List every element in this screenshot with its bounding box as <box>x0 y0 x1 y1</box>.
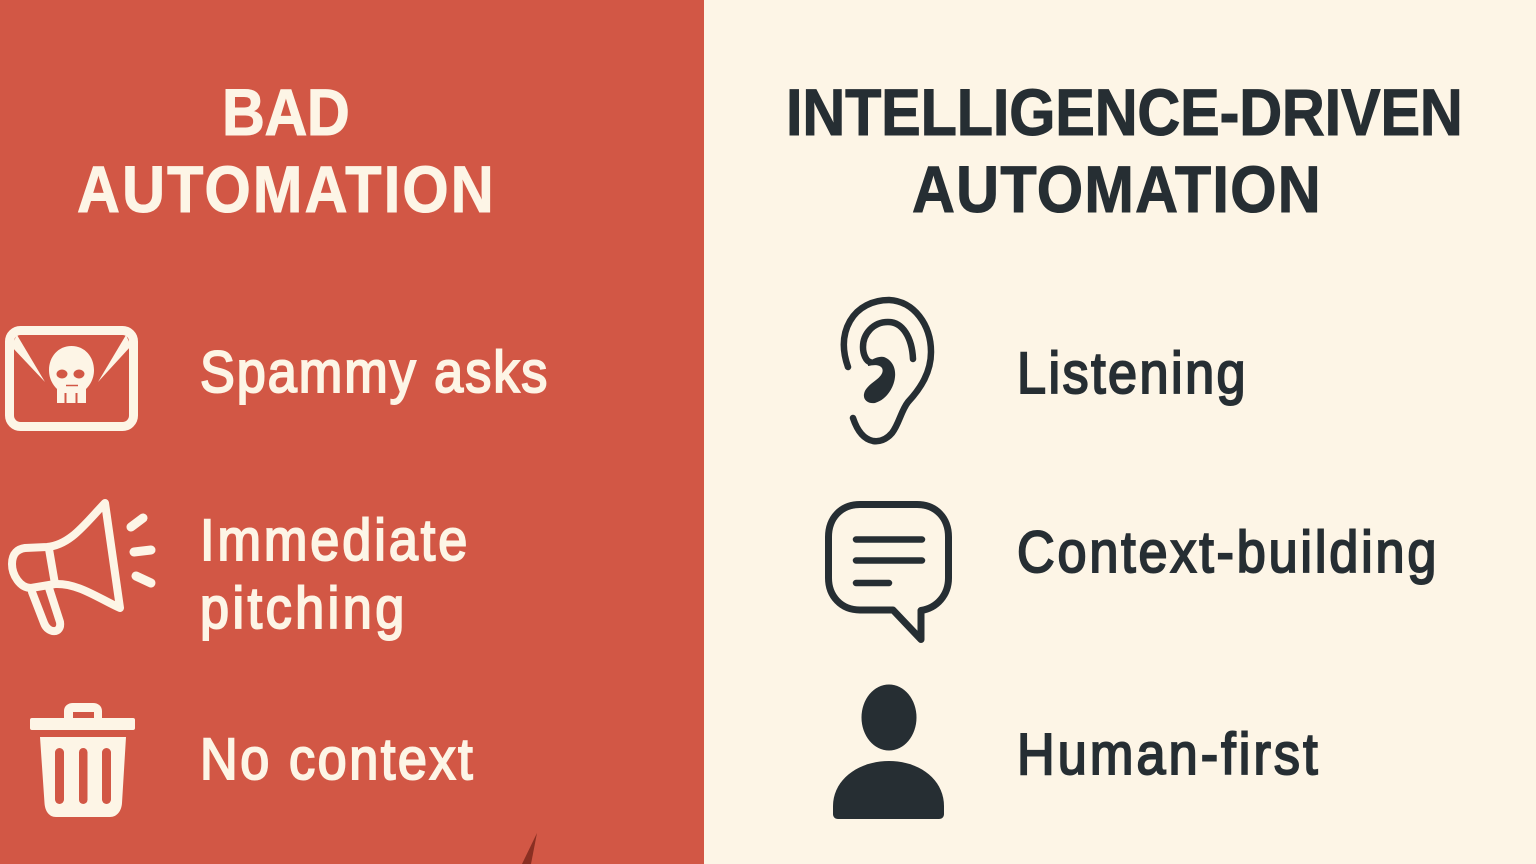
heading: intelligence-driven automation: INTELLIGENCE-DRIVEN <box>786 76 1463 150</box>
heading: bad automation: BAD <box>222 76 350 150</box>
icon: ear <box>844 300 931 441</box>
text: immediate pitching: Immediate <box>200 507 467 573</box>
icon: speech bubble <box>828 504 948 640</box>
heading: bad automation: AUTOMATION <box>77 153 494 227</box>
icon: person <box>833 684 944 819</box>
icon: megaphone <box>12 503 151 631</box>
text: immediate pitching <box>200 507 467 641</box>
panel: bad automation <box>0 0 704 864</box>
text: listening: Listening <box>1017 340 1246 406</box>
text: human-first: Human-first <box>1017 721 1318 787</box>
text: no context: No context <box>200 726 473 792</box>
decorative dark spike <box>522 833 537 864</box>
heading: intelligence-driven automation <box>786 76 1463 227</box>
heading: intelligence-driven automation: AUTOMATION <box>912 153 1321 227</box>
panel: intelligence-driven automation <box>704 0 1536 864</box>
icon: envelope with skull <box>10 330 134 426</box>
heading: bad automation <box>77 76 494 227</box>
text: immediate pitching: pitching <box>200 575 404 641</box>
icon: trash can <box>30 703 135 817</box>
text: spammy asks: Spammy asks <box>200 339 547 405</box>
text: context-building: Context-building <box>1017 519 1436 585</box>
